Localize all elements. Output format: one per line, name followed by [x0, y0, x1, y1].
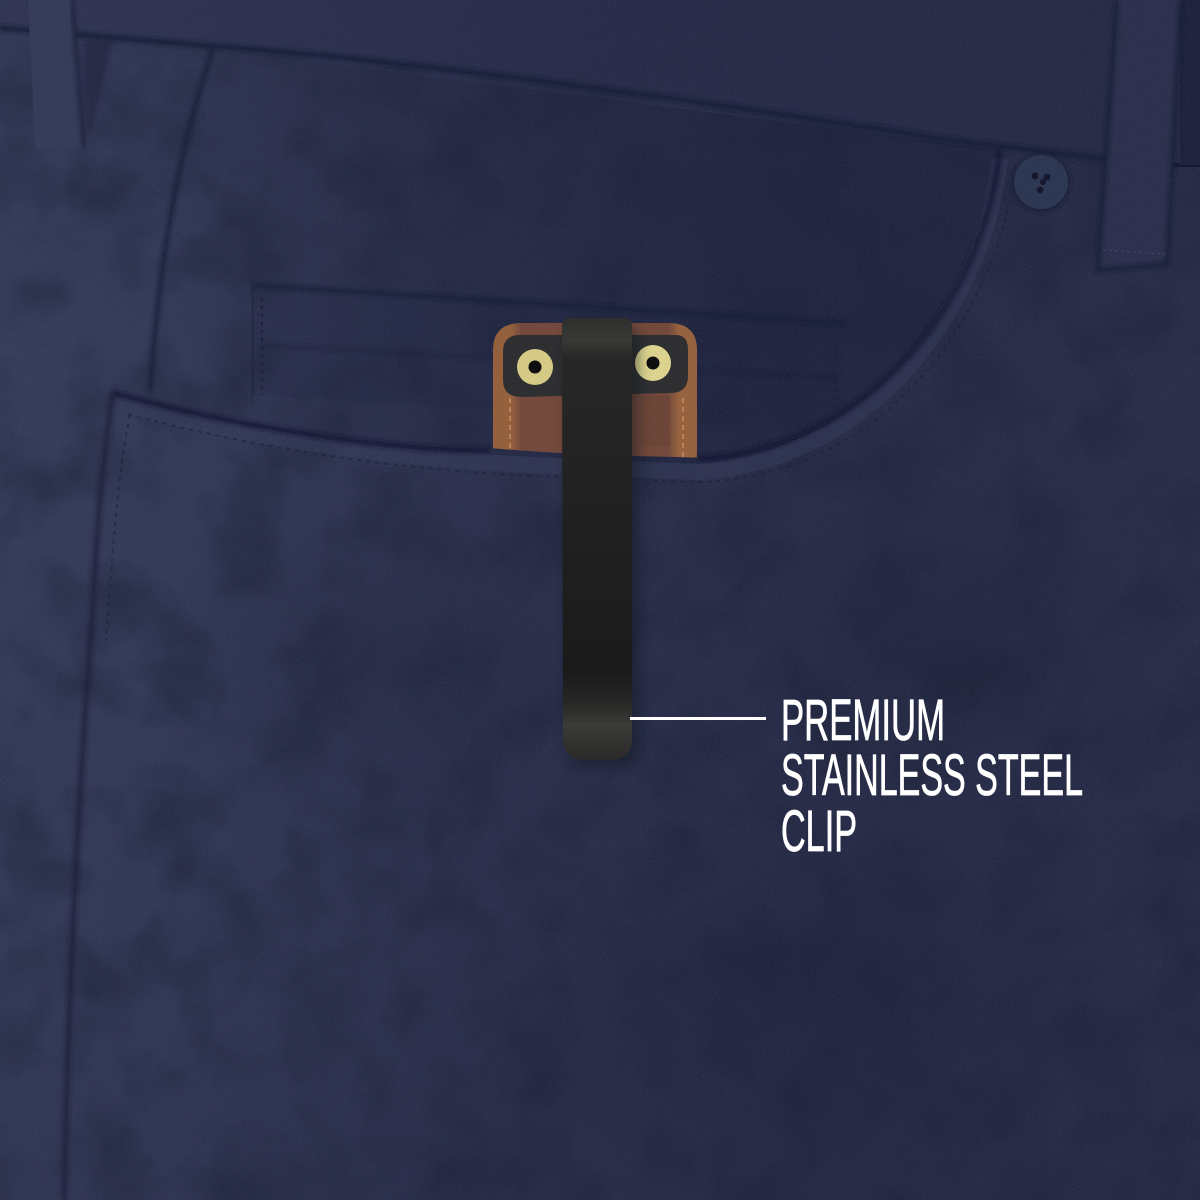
waistband	[0, 0, 1200, 165]
callout text	[781, 688, 1083, 864]
leather wallet	[493, 323, 697, 470]
inner pocket facing, shaded	[150, 48, 1000, 463]
belt loop left	[28, 0, 84, 150]
button	[1012, 154, 1070, 212]
callout text: CLIP	[781, 799, 857, 864]
callout text: PREMIUM	[781, 688, 945, 753]
callout leader line	[630, 717, 766, 720]
wallet metal plate with brass eyelets	[503, 335, 688, 397]
stainless steel clip	[562, 318, 638, 766]
main pocket edge and stitching	[64, 150, 1016, 1200]
coin pocket panel	[252, 285, 845, 430]
belt loop right	[1098, 0, 1181, 270]
left trouser seam	[84, 40, 213, 392]
